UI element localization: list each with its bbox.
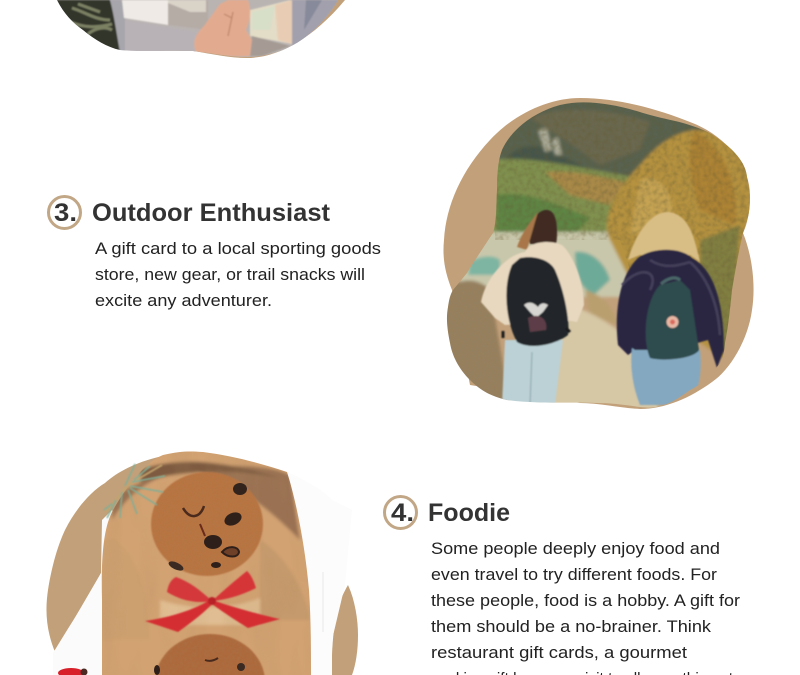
number badge 4: 4.: [391, 499, 414, 527]
body text: A gift card to a local sporting goods: [95, 240, 381, 258]
lake and shore: [460, 232, 630, 297]
cookie 2: [154, 634, 265, 675]
body text: even travel to try different foods. For: [431, 566, 718, 584]
forest: [493, 157, 630, 234]
number badge 3: [48, 196, 80, 228]
cookie 1: [150, 470, 265, 578]
panel: outdoor enthusiast text: [48, 196, 381, 310]
body text: [431, 540, 741, 675]
pine sprig: [104, 464, 165, 518]
foliage texture: [495, 104, 750, 331]
body text: restaurant gift cards, a gourmet: [431, 644, 687, 662]
body text: [95, 240, 381, 310]
heading: Outdoor Enthusiast: Outdoor Enthusiast: [92, 199, 331, 227]
body text: these people, food is a hobby. A gift for: [431, 592, 741, 610]
hiker left: [481, 210, 584, 405]
dry grass: [446, 279, 510, 400]
body text: store, new gear, or trail snacks will: [95, 266, 365, 284]
tan blob right: [332, 585, 358, 675]
heading: Foodie: Foodie: [428, 499, 510, 527]
wooden board: [95, 445, 320, 675]
right tree: [607, 130, 754, 360]
red ribbon bow: [145, 571, 280, 632]
number badge 3: 3.: [54, 199, 77, 227]
red berry: [58, 668, 88, 675]
tan blob edge: [60, 0, 345, 58]
body text: excite any adventurer.: [95, 292, 272, 310]
mountain: [499, 102, 747, 178]
photo blob: two hikers: [440, 95, 760, 410]
hiker right: [617, 212, 724, 405]
photo blob: cookies on wooden board: [46, 445, 358, 675]
tan blob backdrop: [443, 98, 754, 409]
path: [539, 309, 660, 408]
body text: Some people deeply enjoy food and: [431, 540, 720, 558]
white tray background: [54, 510, 112, 652]
gift photo: [57, 0, 338, 57]
photo: hikers on a trail: [440, 95, 760, 410]
panel: foodie text: [384, 496, 741, 675]
body text: them should be a no-brainer. Think: [431, 618, 712, 636]
number badge 4: [384, 496, 416, 528]
photo blob: gift box (cropped top): [50, 0, 350, 60]
grass texture: [445, 285, 510, 405]
tan blob left: [46, 456, 160, 650]
